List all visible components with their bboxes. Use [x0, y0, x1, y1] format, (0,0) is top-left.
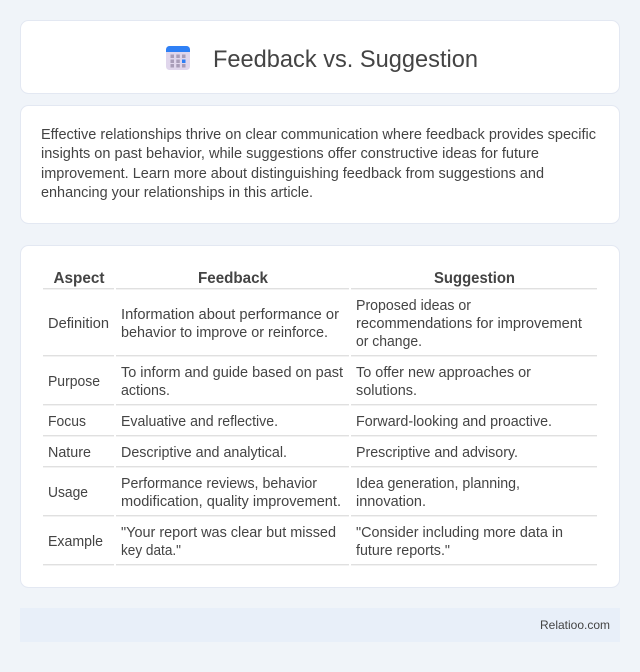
footer — [20, 608, 620, 642]
panel: comparison table — [20, 246, 620, 588]
table header row — [54, 270, 515, 287]
row: usage: Idea generation, planning, — [356, 476, 520, 492]
row: definition: Definition — [48, 316, 109, 332]
row: definition: Proposed ideas or — [356, 298, 471, 314]
row: purpose: To inform and guide based on past — [121, 365, 343, 381]
row: purpose: Purpose — [48, 374, 100, 390]
row: nature — [48, 445, 518, 461]
row: example: future reports." — [356, 543, 450, 559]
row: definition: behavior to improve or reinforce. — [121, 325, 328, 341]
row: purpose: solutions. — [356, 383, 417, 399]
intro text: enhancing your relationships in this article. — [41, 185, 313, 201]
intro text — [41, 127, 596, 201]
table header row: Suggestion — [434, 270, 515, 287]
table header row: Feedback — [198, 270, 268, 287]
row: definition — [48, 298, 582, 350]
row: example: key data." — [121, 543, 181, 559]
row: usage: Performance reviews, behavior — [121, 476, 317, 492]
row: purpose — [48, 365, 531, 399]
row: focus — [48, 414, 552, 430]
icon: calendar — [166, 46, 190, 70]
row: example: Example — [48, 534, 103, 550]
intro text: Effective relationships thrive on clear communication where feedback provides specific — [41, 127, 596, 143]
table header row: Aspect — [54, 270, 105, 287]
row: focus: Forward-looking and proactive. — [356, 414, 552, 430]
intro text: insights on past behavior, while suggestions offer constructive ideas for future — [41, 146, 539, 162]
title: Feedback vs. Suggestion — [213, 46, 478, 73]
row: usage — [48, 476, 520, 510]
footer credit: Relatioo.com — [540, 618, 610, 632]
row: usage: Usage — [48, 485, 88, 501]
row: focus: Focus — [48, 414, 86, 430]
row: example: "Consider including more data in — [356, 525, 563, 541]
row: definition: Information about performance or — [121, 307, 339, 323]
row: purpose: actions. — [121, 383, 170, 399]
row: purpose: To offer new approaches or — [356, 365, 531, 381]
row: example: "Your report was clear but missed — [121, 525, 336, 541]
row: example — [48, 525, 563, 559]
row: usage: innovation. — [356, 494, 426, 510]
row: usage: modification, quality improvement. — [121, 494, 341, 510]
row: nature: Prescriptive and advisory. — [356, 445, 518, 461]
intro text: improvement. Learn more about distinguishing feedback from suggestions and — [41, 166, 544, 182]
header panel — [20, 20, 620, 94]
row: focus: Evaluative and reflective. — [121, 414, 278, 430]
row: definition: or change. — [356, 334, 422, 350]
panel: introduction — [20, 106, 620, 224]
row: definition: recommendations for improvement — [356, 316, 582, 332]
row: nature: Nature — [48, 445, 91, 461]
row: nature: Descriptive and analytical. — [121, 445, 287, 461]
